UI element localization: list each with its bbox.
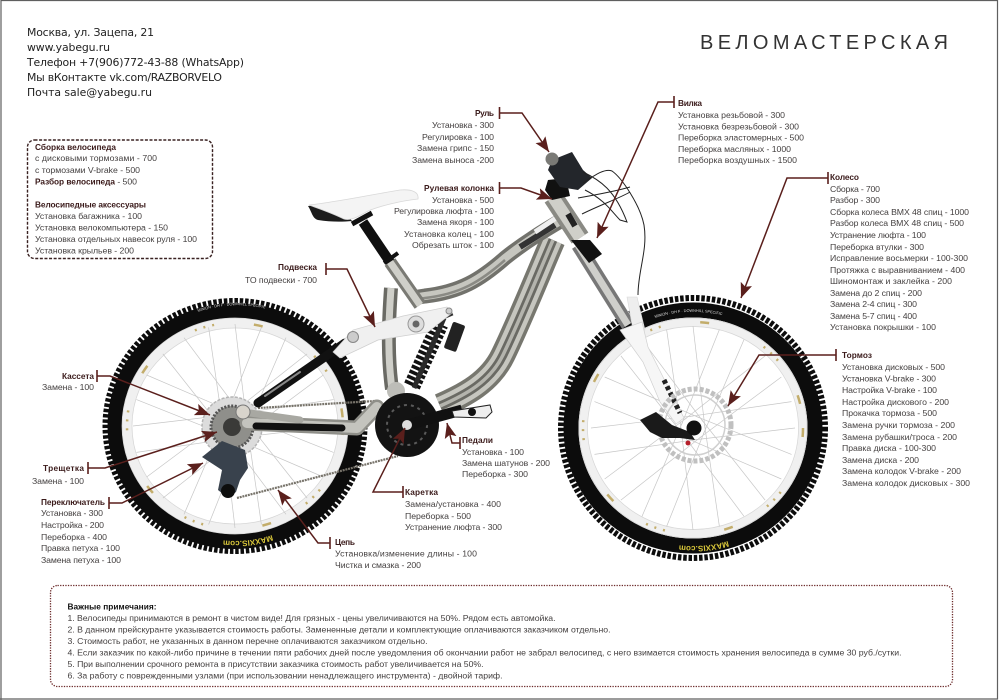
label: freewheel: Замена - 100 (32, 476, 84, 486)
label: pedals: Замена шатунов - 200 (462, 458, 550, 468)
label: handlebar: Замена грипс - 150 (417, 143, 494, 153)
label: pedals: Переборка - 300 (462, 469, 528, 479)
arrow: derailleur (109, 463, 203, 509)
label: wheel: Устранение люфта - 100 (830, 230, 926, 240)
label: fork: Установка безрезьбовой - 300 (678, 122, 799, 132)
label: derailleur: Переключатель (41, 497, 105, 507)
label: brake: Замена рубашки/троса - 200 (842, 432, 957, 442)
panel: assembly and accessories: Установка багажника - 100 (35, 211, 142, 221)
label: chain (335, 537, 477, 570)
label: wheel: Установка покрышки - 100 (830, 322, 936, 332)
panel: important notes: 5. При выполнении срочного ремонта в присутствии заказчика стоимость работ увеличивается на 50%. (68, 659, 484, 669)
label: derailleur: Настройка - 200 (41, 520, 104, 530)
arrow: headset (500, 182, 552, 199)
rear link (333, 307, 452, 358)
label: brake: Прокачка тормоза - 500 (842, 408, 937, 418)
label: brake: Установка дисковых - 500 (842, 362, 945, 372)
arrow: suspension (326, 263, 375, 327)
label: wheel: Замена 2-4 спиц - 300 (830, 299, 917, 309)
panel: assembly and accessories: Установка отдельных навесок руля - 100 (35, 234, 197, 244)
label: headset: Замена якоря - 100 (417, 217, 494, 227)
panel: assembly and accessories: Велосипедные аксессуары (35, 200, 146, 210)
panel: assembly and accessories: Сборка велосипеда (35, 142, 116, 152)
label: chain: Установка/изменение длины - 100 (335, 548, 477, 558)
label: brake: Замена колодок V-brake - 200 (842, 466, 961, 476)
label: derailleur (41, 497, 121, 565)
arrow: pedals (447, 423, 460, 449)
contact block: Почта sale@yabegu.ru (27, 86, 152, 99)
crankset and pedal (375, 393, 492, 457)
label: wheel: Колесо (830, 172, 859, 182)
label: wheel: Замена 5-7 спиц - 400 (830, 311, 917, 321)
label: brake: Правка диска - 100-300 (842, 443, 936, 453)
label: chain: Цепь (335, 537, 355, 547)
frame tubes (389, 197, 580, 406)
arrow: bottom bracket (373, 428, 405, 498)
title: ВЕЛОМАСТЕРСКАЯ (700, 32, 948, 54)
label: derailleur: Установка - 300 (41, 508, 103, 518)
label: handlebar: Руль (475, 108, 494, 118)
label: wheel: Исправление восьмерки - 100-300 (830, 253, 968, 263)
label: brake: Замена колодок дисковых - 300 (842, 478, 970, 488)
front wheel: MINION · DH F · DOWNHILL SPECIFIC (654, 309, 722, 318)
arrow: handlebar (500, 107, 549, 152)
label: brake (842, 350, 970, 488)
label: headset (394, 183, 494, 250)
label: freewheel: Трещетка (43, 463, 84, 473)
panel: assembly and accessories: с дисковыми тормозами - 700 (35, 153, 157, 163)
label: suspension (245, 262, 317, 285)
label: suspension: ТО подвески - 700 (245, 275, 317, 285)
panel: assembly and accessories: Установка велокомпьютера - 150 (35, 222, 168, 232)
contact block: Мы вКонтакте vk.com/RAZBORVELO (27, 71, 222, 84)
label: cassette: Кассета (62, 371, 94, 381)
arrow: wheel (741, 172, 828, 298)
label: bottom bracket (405, 487, 502, 532)
label: wheel: Разбор - 300 (830, 195, 880, 205)
label: wheel (830, 172, 969, 332)
label: headset: Установка - 500 (432, 195, 494, 205)
label: handlebar: Установка - 300 (432, 120, 494, 130)
rear wheel: MAXXIS.com (223, 535, 273, 546)
panel: assembly and accessories (28, 140, 212, 258)
seatpost and saddle (308, 190, 418, 263)
contact block: www.yabegu.ru (27, 41, 110, 54)
panel: important notes: 4. Если заказчик по какой-либо причине в течении пяти рабочих дней после уведомления об окончании работ не забрал велосипед, с него взимается стоимость хранения велосипеда в сумме 30 руб./сутки. (68, 648, 902, 658)
rear wheel: MINION · DH F · DOWNHILL SPECIFIC (198, 302, 266, 312)
rear derailleur (202, 441, 248, 498)
front wheel (558, 295, 828, 561)
label: headset: Обрезать шток - 100 (412, 240, 494, 250)
shock (387, 312, 465, 400)
label: cassette: Замена - 100 (42, 382, 94, 392)
front wheel: MAXXIS.com (679, 541, 729, 552)
label: handlebar: Замена выноса -200 (412, 155, 494, 165)
label: fork: Переборка эластомерных - 500 (678, 132, 804, 142)
label: bottom bracket: Переборка - 500 (405, 511, 471, 521)
handlebar and cables (545, 152, 645, 295)
contact block (26, 26, 244, 99)
swingarm stays (236, 343, 377, 428)
panel: assembly and accessories: Разбор велосипеда - 500 (35, 176, 137, 186)
front brake rotor and caliper (640, 389, 731, 461)
label: suspension: Подвеска (278, 262, 317, 272)
label: derailleur: Правка петуха - 100 (41, 543, 120, 553)
label: derailleur: Переборка - 400 (41, 532, 107, 542)
label: wheel: Протяжка с выравниванием - 400 (830, 265, 965, 275)
label: brake: Настройка V-brake - 100 (842, 385, 937, 395)
label: cassette (42, 371, 94, 392)
label: bottom bracket: Каретка (405, 487, 438, 497)
contact block: Москва, ул. Зацепа, 21 (27, 26, 154, 39)
panel: important notes: 3. Стоимость работ, не указанных в данном перечне оплачиваются заказчиком отдельно. (68, 636, 428, 646)
arrow: cassette (97, 370, 210, 415)
label: freewheel (32, 463, 84, 486)
label: fork: Переборка масляных - 1000 (678, 144, 791, 154)
arrow: freewheel (88, 432, 217, 474)
label: fork: Вилка (678, 98, 702, 108)
label: fork (678, 98, 804, 165)
label: fork: Установка резьбовой - 300 (678, 110, 785, 120)
panel: assembly and accessories: Установка крыльев - 200 (35, 246, 134, 256)
panel: assembly and accessories: с тормозами V-brake - 500 (35, 165, 140, 175)
panel: important notes: 2. В данном прейскуранте указывается стоимость работы. Замененные детали и комплектующие оплачиваются заказчиком отдельно. (68, 624, 610, 634)
label: brake: Установка V-brake - 300 (842, 374, 936, 384)
label: bottom bracket: Замена/установка - 400 (405, 499, 501, 509)
label: pedals: Установка - 100 (462, 447, 524, 457)
label: wheel: Сборка - 700 (830, 184, 880, 194)
label: wheel: Сборка колеса BMX 48 спиц - 1000 (830, 207, 969, 217)
label: headset: Рулевая колонка (424, 183, 494, 193)
arrow: fork (597, 96, 674, 238)
label: fork: Переборка воздушных - 1500 (678, 155, 797, 165)
label: wheel: Переборка втулки - 300 (830, 242, 924, 252)
panel: important notes: Важные примечания: (68, 602, 156, 612)
label: headset: Установка колец - 100 (404, 229, 494, 239)
chain (237, 401, 398, 498)
label: brake: Тормоз (842, 350, 872, 360)
panel: important notes: 1. Велосипеды принимаются в ремонт в чистом виде! Для грязных - цены увеличиваются на 50%. Рядом есть автомойка. (68, 613, 556, 623)
label: brake: Замена ручки тормоза - 200 (842, 420, 955, 430)
rear brake rotor and cassette (202, 397, 262, 457)
bicycle illustration (102, 152, 828, 561)
label: pedals: Педали (462, 435, 493, 445)
label: brake: Настройка дискового - 200 (842, 397, 949, 407)
label: handlebar: Регулировка - 100 (422, 132, 494, 142)
contact block: Телефон +7(906)772-43-88 (WhatsApp) (26, 56, 244, 69)
panel: important notes: 6. За работу с поврежденными узлами (при использовании ненадлежащего инструмента) - двойной тариф. (68, 670, 502, 680)
fork (571, 240, 684, 424)
label: wheel: Замена до 2 спиц - 200 (830, 288, 922, 298)
label: handlebar (412, 108, 494, 165)
arrow: brake (728, 349, 836, 406)
panel: important notes (50, 586, 952, 686)
label: wheel: Шиномонтаж и заклейка - 200 (830, 276, 952, 286)
label: pedals (462, 435, 550, 479)
label: brake: Замена диска - 200 (842, 455, 919, 465)
label: chain: Чистка и смазка - 200 (335, 560, 421, 570)
arrow: chain (278, 490, 330, 549)
label: derailleur: Замена петуха - 100 (41, 555, 121, 565)
label: headset: Регулировка люфта - 100 (394, 206, 494, 216)
label: bottom bracket: Устранение люфта - 300 (405, 522, 502, 532)
rear wheel (102, 298, 368, 554)
label: wheel: Разбор колеса BMX 48 спиц - 500 (830, 218, 964, 228)
